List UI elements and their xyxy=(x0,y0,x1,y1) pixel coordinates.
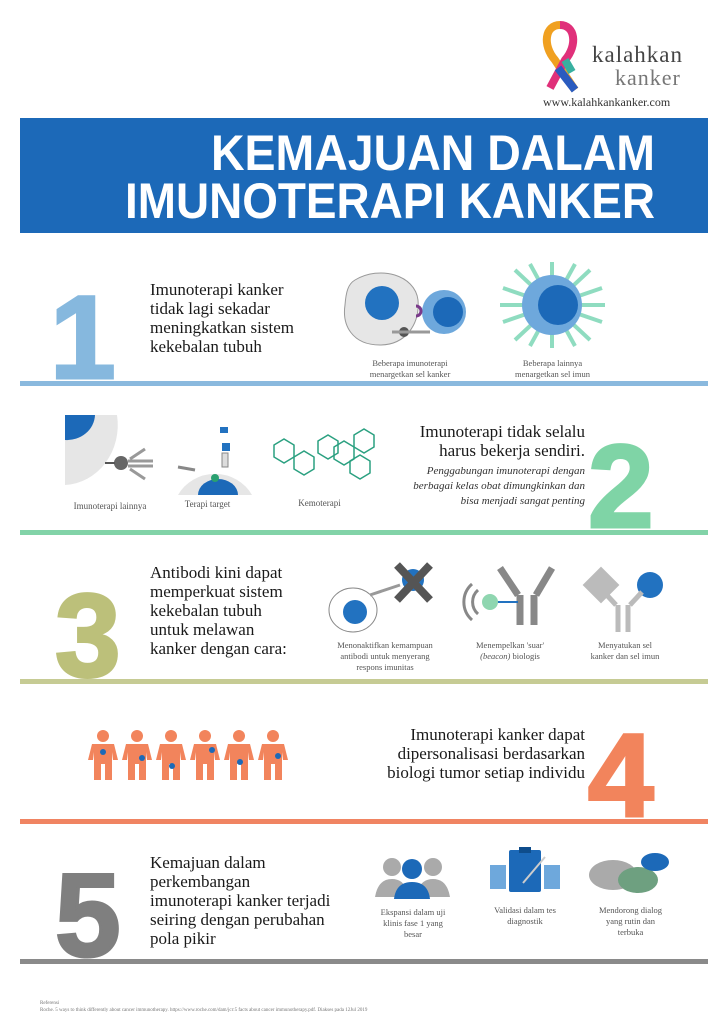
number 2: 2 xyxy=(588,421,654,553)
icon: deactivate: Menonaktifkan kemampuan antibodi untuk menyerang respons imunitas xyxy=(337,640,433,672)
title banner: IMUNOTERAPI KANKER xyxy=(125,173,655,229)
icon: cancer cell with immune cell: Beberapa imunoterapi menargetkan sel kanker xyxy=(370,358,450,379)
icon: immune cell xyxy=(500,262,605,379)
section 5 xyxy=(55,847,669,982)
number 1: 1 xyxy=(50,272,116,404)
icon: clipboards xyxy=(490,847,560,926)
text 2 xyxy=(413,422,585,507)
number 4: 4 xyxy=(588,710,654,842)
text 4: biologi tumor setiap individu xyxy=(387,763,585,782)
number 3: 3 xyxy=(55,570,121,702)
number 5: 5 xyxy=(55,850,121,982)
icon: beacon xyxy=(462,566,555,661)
text 5: pola pikir xyxy=(150,929,216,948)
logo: www.kalahkankanker.com xyxy=(543,95,670,109)
title banner: KEMAJUAN DALAM xyxy=(211,125,655,181)
text 1: meningkatkan sistem xyxy=(150,318,294,337)
icon: cancer cell with immune cell xyxy=(344,272,466,379)
text 2: Imunoterapi tidak selalu xyxy=(420,422,585,441)
text 4: dipersonalisasi berdasarkan xyxy=(398,744,585,763)
references: Roche. 5 ways to think differently about cancer immunotherapy. https://www.roche.com/dam/jcr:5 facts about cancer immunotherapy.pdf. Diakses pada 12Jul 2019 xyxy=(40,1008,367,1013)
icon: beacon: Menempelkan 'suar' (beacon) biologis xyxy=(476,640,544,661)
logo: kanker xyxy=(615,65,681,90)
references: Referensi xyxy=(40,1001,59,1006)
text 5: perkembangan xyxy=(150,872,250,891)
icon: immune cell: Beberapa lainnya menargetkan sel imun xyxy=(515,358,590,379)
text 3: Antibodi kini dapat xyxy=(150,563,282,582)
text 3: memperkuat sistem xyxy=(150,582,283,601)
logo xyxy=(542,21,683,109)
icon: deactivate xyxy=(328,562,433,672)
text 5: imunoterapi kanker terjadi xyxy=(150,891,330,910)
icon: chemotherapy molecules xyxy=(273,428,375,508)
text 1: kekebalan tubuh xyxy=(150,337,262,356)
icon: people group xyxy=(375,858,450,939)
text 4 xyxy=(387,725,585,782)
section 3 xyxy=(55,562,663,702)
text 3: untuk melawan xyxy=(150,620,254,639)
logo: kalahkan xyxy=(592,42,683,67)
title banner xyxy=(20,118,708,233)
icon: people xyxy=(88,730,288,780)
icon: other immunotherapy xyxy=(65,415,153,511)
text 2: bisa menjadi sangat penting xyxy=(461,495,585,507)
section 1 xyxy=(50,262,605,404)
icon: targeted therapy xyxy=(178,427,252,509)
icon: speech bubbles: Mendorong dialog yang rutin dan terbuka xyxy=(599,905,662,937)
text 2: Penggabungan imunoterapi dengan xyxy=(427,465,585,477)
section 4 xyxy=(88,710,654,842)
text 3 xyxy=(150,563,287,658)
icon: people group: Ekspansi dalam uji klinis fase 1 yang besar xyxy=(381,907,445,939)
text 5: seiring dengan perubahan xyxy=(150,910,325,929)
text 5 xyxy=(150,853,330,948)
icon: bridging xyxy=(582,566,663,661)
text 2: berbagai kelas obat dimungkinkan dan xyxy=(413,480,585,492)
text 3: kekebalan tubuh xyxy=(150,601,262,620)
icon: chemotherapy molecules: Kemoterapi xyxy=(298,498,341,508)
icon: clipboards: Validasi dalam tes diagnostik xyxy=(494,905,556,926)
icon: bridging: Menyatukan sel kanker dan sel imun xyxy=(591,640,659,661)
icon: targeted therapy: Terapi target xyxy=(185,499,230,509)
text 5: Kemajuan dalam xyxy=(150,853,266,872)
text 2: harus bekerja sendiri. xyxy=(439,441,585,460)
text 4: Imunoterapi kanker dapat xyxy=(410,725,585,744)
text 1 xyxy=(150,280,294,356)
references xyxy=(40,1000,368,1013)
text 1: tidak lagi sekadar xyxy=(150,299,270,318)
section 2 xyxy=(65,415,654,553)
text 3: kanker dengan cara: xyxy=(150,639,287,658)
text 1: Imunoterapi kanker xyxy=(150,280,284,299)
icon: speech bubbles xyxy=(589,853,669,937)
icon: other immunotherapy: Imunoterapi lainnya xyxy=(74,501,146,511)
